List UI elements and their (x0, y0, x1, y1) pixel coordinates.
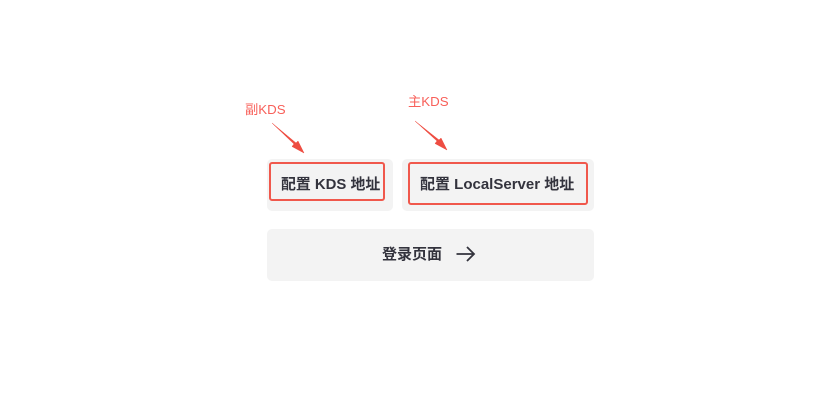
annotation label: secondary KDS: 副KDS (245, 102, 286, 117)
arrow: primary KDS pointer (415, 120, 448, 150)
icon: right arrow (456, 246, 476, 262)
annotation label: primary KDS: 主KDS (408, 94, 449, 109)
highlight box: secondary KDS (269, 162, 385, 201)
button: login page (267, 229, 594, 281)
button: configure LocalServer address (402, 159, 594, 211)
button label: login page: 登录页面 (382, 246, 442, 263)
highlight box: primary KDS (408, 162, 588, 205)
button label: configure LocalServer address: 配置 LocalServer 地址 (420, 176, 574, 193)
button label: configure KDS address: 配置 KDS 地址 (281, 177, 380, 193)
arrow: secondary KDS pointer (272, 122, 304, 154)
button: configure KDS address (267, 159, 393, 211)
